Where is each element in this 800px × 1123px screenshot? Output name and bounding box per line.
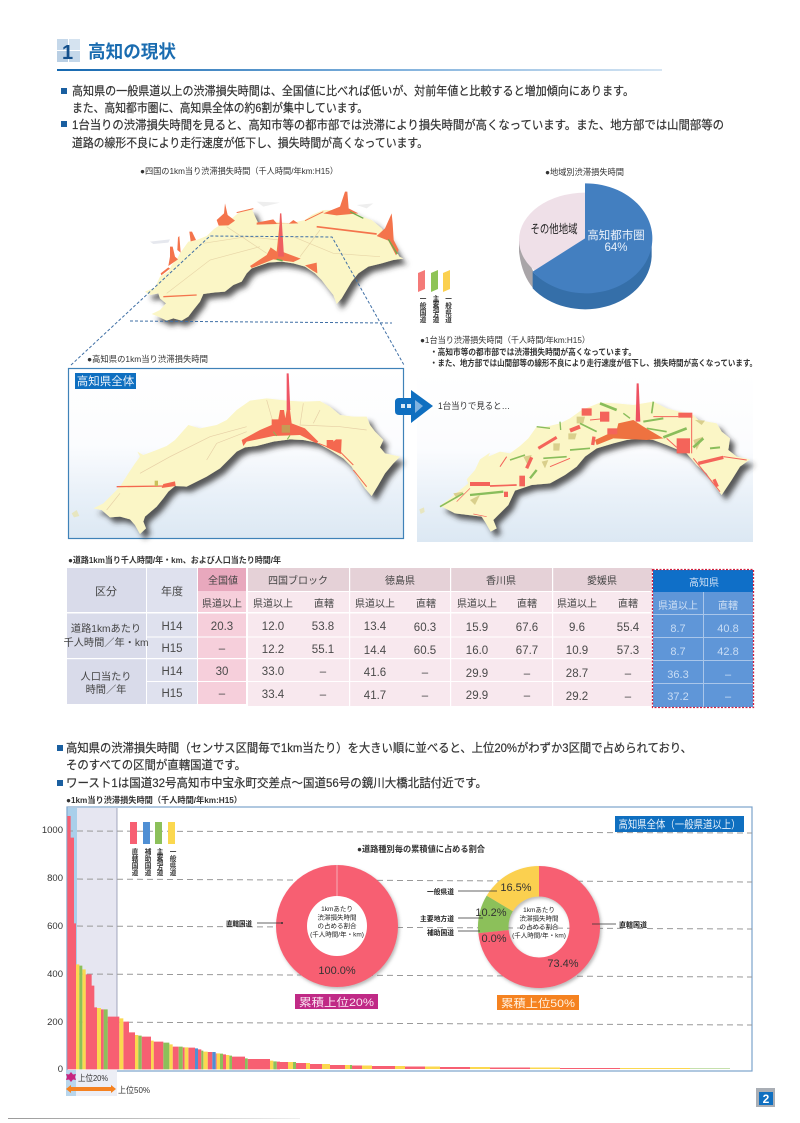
legend: road types: 一般県道 xyxy=(168,848,176,877)
table values: 67.6 xyxy=(516,622,538,634)
caption: bar chart: ●1km当り渋滞損失時間（千人時間/年km:H15） xyxy=(66,795,242,805)
legend: road types: 補助国道 xyxy=(143,847,151,877)
table header xyxy=(95,574,638,610)
table header: 四国ブロック xyxy=(268,574,328,587)
table values: 60.3 xyxy=(414,622,436,634)
table header: 直轄 xyxy=(314,597,334,610)
table header: 県道以上 xyxy=(355,597,395,610)
y axis labels: 200 xyxy=(47,1017,63,1028)
table values: 16.0 xyxy=(466,645,488,657)
legend: road types xyxy=(130,822,176,877)
table row labels: 時間／年 xyxy=(86,683,126,696)
legend: road types: 直轄国道 xyxy=(130,847,138,877)
map: Kochi per vehicle xyxy=(417,372,753,542)
table values: 20.3 xyxy=(211,621,233,633)
donut: top 50 percent: 渋滞損失時間 xyxy=(520,914,558,922)
bars xyxy=(67,816,280,1069)
donut: top 50 percent: の占める割合 xyxy=(520,922,559,931)
table values: 15.9 xyxy=(466,622,488,634)
table values: – xyxy=(524,668,531,680)
y axis labels: 0 xyxy=(58,1064,63,1075)
caption: donut charts: ●道路種別毎の累積値に占める割合 xyxy=(357,843,485,854)
label: whole prefecture chart xyxy=(615,816,744,832)
table values: 10.9 xyxy=(566,645,588,657)
table header: 区分 xyxy=(95,585,117,598)
marker: top 20 percent xyxy=(66,1072,108,1083)
donut: top 20 percent: の占める割合 xyxy=(318,921,357,930)
text block: worst sections bullets: ワースト1は国道32号高知市中宝永町交差点～国道56号の鏡川大橋北詰付近です。 xyxy=(66,775,487,790)
table row labels: 道路1kmあたり xyxy=(71,622,141,635)
table column: Kochi highlighted: 直轄 xyxy=(718,599,738,612)
table values: 41.7 xyxy=(364,690,386,702)
donut: top 50 percent: 73.4% xyxy=(547,958,579,970)
legend: road types: 主要地方道 xyxy=(155,847,163,877)
donut: top 50 percent: (千人時間/年・km) xyxy=(512,930,566,940)
text block: intro bullets: 高知県の一般県道以上の渋滞損失時間は、全国値に比べれば低いが、対前年値と比較すると増加傾向にあります。 xyxy=(72,83,634,98)
table values: 29.2 xyxy=(566,691,588,703)
caption: regional pie: ●地域別渋滞損失時間 xyxy=(545,167,624,177)
table row labels: 千人時間／年・km xyxy=(64,636,148,649)
table header: 県道以上 xyxy=(557,597,597,610)
text block: intro bullets: また、高知都市圏に、高知県全体の約6割が集中しています。 xyxy=(72,100,368,115)
table header: 年度 xyxy=(161,584,183,598)
table values: 12.2 xyxy=(262,644,284,656)
legend: road types for map: 主要地方道 xyxy=(431,294,439,324)
label: whole prefecture chart: 高知県全体（一般県道以上） xyxy=(618,817,740,831)
y axis labels: 1000 xyxy=(42,825,63,836)
table column: Kochi highlighted: – xyxy=(725,669,732,681)
map: Shikoku 3D road loss xyxy=(145,192,403,321)
donut: top 50 percent: 16.5% xyxy=(500,882,532,894)
badge: cumulative top 50 percent xyxy=(497,995,579,1010)
table values: – xyxy=(422,667,429,679)
caption: Shikoku map: ●四国の1km当り渋滞損失時間（千人時間/年km:H15） xyxy=(140,166,338,176)
text block: worst sections bullets: 高知県の渋滞損失時間（センサス区間毎で1km当たり）を大きい順に並べると、上位20%がわずか3区間で占められており、 xyxy=(66,740,692,755)
badge: cumulative top 20 percent xyxy=(295,994,378,1009)
donut: top 50 percent: 一般県道 xyxy=(427,887,454,896)
table header: 徳島県 xyxy=(385,574,415,587)
donut: top 50 percent: 補助国道 xyxy=(427,928,454,937)
table row labels: H15 xyxy=(161,688,183,700)
table values: 12.0 xyxy=(262,621,284,633)
table values: – xyxy=(219,688,226,700)
table: loss per km and per person xyxy=(64,568,754,708)
table row labels: 人口当たり xyxy=(81,670,131,683)
text block: per-vehicle notes xyxy=(420,335,757,368)
marker: top 20 percent: 上位20% xyxy=(78,1073,108,1083)
pie chart: regional share: 高知都市圏 xyxy=(587,228,645,242)
panel: Kochi prefecture map xyxy=(68,368,404,538)
arrow: top 50 percent: 上位50% xyxy=(118,1085,151,1095)
table header: 県道以上 xyxy=(457,597,497,610)
donut: top 50 percent: 0.0% xyxy=(481,933,507,945)
icon: section number 1: 1 xyxy=(62,42,73,64)
arrow: to per-vehicle map xyxy=(395,390,433,423)
y axis labels xyxy=(42,825,63,1075)
table values: 30 xyxy=(216,666,228,678)
table values xyxy=(211,621,640,703)
label: whole prefecture: 高知県全体 xyxy=(77,374,135,388)
text block: worst sections bullets xyxy=(57,740,692,790)
donut: top 50 percent: 1kmあたり xyxy=(523,906,555,914)
table column: Kochi highlighted: 県道以上 xyxy=(658,599,698,612)
table column: Kochi highlighted: 40.8 xyxy=(717,623,739,635)
table values: 53.8 xyxy=(312,621,334,633)
table values: 28.7 xyxy=(566,668,588,680)
text: per-vehicle lead in: 1台当りで見ると… xyxy=(438,400,510,411)
badge: cumulative top 20 percent: 累積上位20% xyxy=(299,995,374,1009)
pie chart: regional share xyxy=(519,183,652,309)
donut: top 20 percent: (千人時間/年・km) xyxy=(310,930,364,938)
table values: – xyxy=(625,668,632,680)
text block: intro bullets: 1台当りの渋滞損失時間を見ると、高知市等の都市部では渋滞により損失時間が高くなっています。また、地方部では山間部等の xyxy=(72,117,724,132)
pie slice: Kochi urban area xyxy=(533,183,652,309)
caption: table: ●道路1km当り千人時間/年・km、および人口当たり時間/年 xyxy=(68,555,282,565)
page number xyxy=(756,1088,775,1107)
table values: – xyxy=(422,690,429,702)
table values: 41.6 xyxy=(364,667,386,679)
table row labels: H14 xyxy=(161,666,183,678)
text block: intro bullets: 道路の線形不良により走行速度が低下し、損失時間が高くなっています。 xyxy=(72,135,428,150)
donut: top 20 percent xyxy=(226,865,398,987)
text block: per-vehicle notes: ●1台当り渋滞損失時間（千人時間/年km:H15） xyxy=(420,335,590,345)
donut: top 20 percent: 渋滞損失時間 xyxy=(318,912,356,922)
table values: – xyxy=(524,690,531,702)
table values: – xyxy=(625,691,632,703)
table values: 57.3 xyxy=(617,645,639,657)
table values: 9.6 xyxy=(569,622,585,634)
header: section title xyxy=(57,39,662,71)
table values: 29.9 xyxy=(466,668,488,680)
table values: – xyxy=(320,689,327,701)
table values: 13.4 xyxy=(364,621,387,633)
table column: Kochi highlighted: 36.3 xyxy=(667,669,689,681)
table values: – xyxy=(320,666,327,678)
table header: 県道以上 xyxy=(253,597,293,610)
legend: road types for map: 一般国道 xyxy=(418,295,426,324)
table values: 14.4 xyxy=(364,645,387,657)
dashed zoom lines xyxy=(71,236,404,365)
badge: cumulative top 50 percent: 累積上位50% xyxy=(501,996,575,1010)
table values: 55.4 xyxy=(617,622,640,634)
table values: 60.5 xyxy=(414,645,436,657)
text block: worst sections bullets: そのすべての区間が直轄国道です。 xyxy=(66,757,246,772)
table column: Kochi highlighted: 42.8 xyxy=(717,646,739,658)
table column: Kochi highlighted: 高知県 xyxy=(689,576,719,589)
table column: Kochi highlighted: 37.2 xyxy=(667,691,689,703)
donut: top 50 percent: 主要地方道 xyxy=(420,914,454,923)
pie slice: other regions xyxy=(519,193,651,288)
bars: long tail xyxy=(280,1062,730,1069)
table column: Kochi highlighted: 8.7 xyxy=(670,646,686,658)
legend: road types for map xyxy=(418,270,452,324)
donut: top 50 percent: 10.2% xyxy=(475,907,507,919)
chart: ranked loss bars xyxy=(42,807,752,1096)
pie chart: regional share: 64% xyxy=(604,242,628,254)
text block: intro bullets xyxy=(61,83,724,150)
table header: 直轄 xyxy=(618,597,638,610)
table header: 直轄 xyxy=(517,597,537,610)
donut: top 50 percent xyxy=(420,866,647,988)
caption: Kochi map: ●高知県の1km当り渋滞損失時間 xyxy=(87,354,208,364)
y axis labels: 400 xyxy=(47,969,63,980)
pie chart: regional share: その他地域 xyxy=(530,222,578,236)
y axis labels: 600 xyxy=(47,921,63,932)
table column: Kochi highlighted: 8.7 xyxy=(670,623,686,635)
icon: section number 1 xyxy=(57,39,80,64)
table row labels: H14 xyxy=(161,621,183,633)
legend: road types for map: 一般県道 xyxy=(444,295,452,324)
table header: 県道以上 xyxy=(202,597,242,610)
table values: 33.4 xyxy=(262,689,285,701)
donut: top 20 percent: 100.0% xyxy=(318,965,356,977)
map: Kochi per km xyxy=(72,373,400,534)
table values: 29.9 xyxy=(466,690,488,702)
table column: Kochi highlighted: – xyxy=(725,691,732,703)
table header: 直轄 xyxy=(416,597,436,610)
table column: Kochi highlighted xyxy=(652,570,754,708)
donut: top 20 percent: 1kmあたり xyxy=(321,905,353,913)
table values: – xyxy=(219,643,226,655)
table background cells xyxy=(67,568,652,706)
table values: 55.1 xyxy=(312,644,334,656)
y axis labels: 800 xyxy=(47,873,63,884)
donut: top 50 percent: 直轄国道 xyxy=(619,920,647,929)
table header: 愛媛県 xyxy=(587,574,617,587)
arrow: top 50 percent xyxy=(66,1085,151,1095)
text block: per-vehicle notes: ・また、地方部では山間部等の線形不良により走行速度が低下し、損失時間が高くなっています。 xyxy=(430,358,757,368)
table row labels: H15 xyxy=(161,643,183,655)
table header: 香川県 xyxy=(486,575,516,587)
title: 高知の現状 xyxy=(88,42,176,62)
table values: 33.0 xyxy=(262,666,284,678)
table values: 67.7 xyxy=(516,645,538,657)
page number: 2 xyxy=(763,1092,770,1106)
table header: 全国値 xyxy=(208,574,238,587)
donut: top 20 percent: 直轄国道 xyxy=(226,919,252,928)
text block: per-vehicle notes: ・高知市等の都市部では渋滞損失時間が高くなっています。 xyxy=(430,347,636,357)
table row labels xyxy=(64,621,183,700)
